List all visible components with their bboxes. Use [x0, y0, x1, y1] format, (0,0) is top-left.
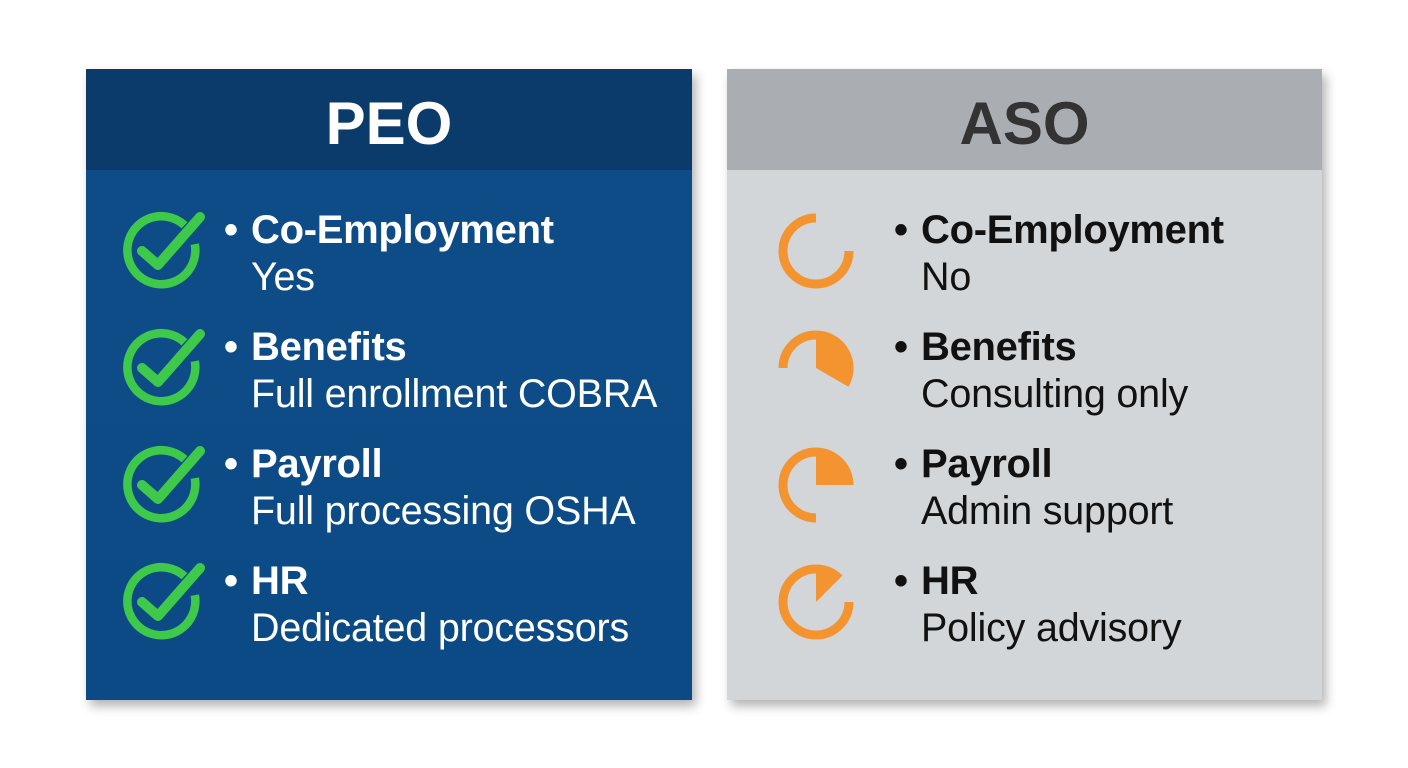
item: Co-Employment [123, 208, 554, 299]
item: Benefits [123, 325, 658, 416]
item: Payroll: Full processing OSHA [251, 489, 636, 533]
item: HR: HR [921, 559, 978, 603]
item: Payroll: Payroll [921, 442, 1052, 486]
heading: ASO: ASO [959, 90, 1090, 157]
item: HR [123, 559, 629, 650]
item: Benefits: Consulting only [921, 372, 1188, 416]
item: Co-Employment: Co-Employment [251, 208, 554, 252]
item: HR: HR [251, 559, 308, 603]
heading: PEO [86, 69, 692, 170]
panel: PEO [86, 69, 692, 700]
item: Payroll: Payroll [251, 442, 382, 486]
item: Benefits: Full enrollment COBRA [251, 372, 657, 416]
item: Payroll: Admin support [921, 489, 1173, 533]
item: Benefits [778, 325, 1188, 416]
item: Benefits: Benefits [921, 325, 1076, 369]
item: Co-Employment [778, 208, 1224, 299]
item: Co-Employment: No [921, 255, 971, 299]
item: Payroll [778, 442, 1173, 533]
item: Co-Employment: Yes [251, 255, 315, 299]
item: Benefits: Benefits [251, 325, 406, 369]
item: HR [778, 559, 1182, 650]
item: HR: Policy advisory [921, 606, 1181, 650]
panel: ASO [727, 69, 1322, 700]
item: Payroll [123, 442, 636, 533]
item: Co-Employment: Co-Employment [921, 208, 1224, 252]
heading: ASO [727, 69, 1322, 170]
item: HR: Dedicated processors [251, 606, 629, 650]
heading: PEO: PEO [326, 90, 452, 157]
